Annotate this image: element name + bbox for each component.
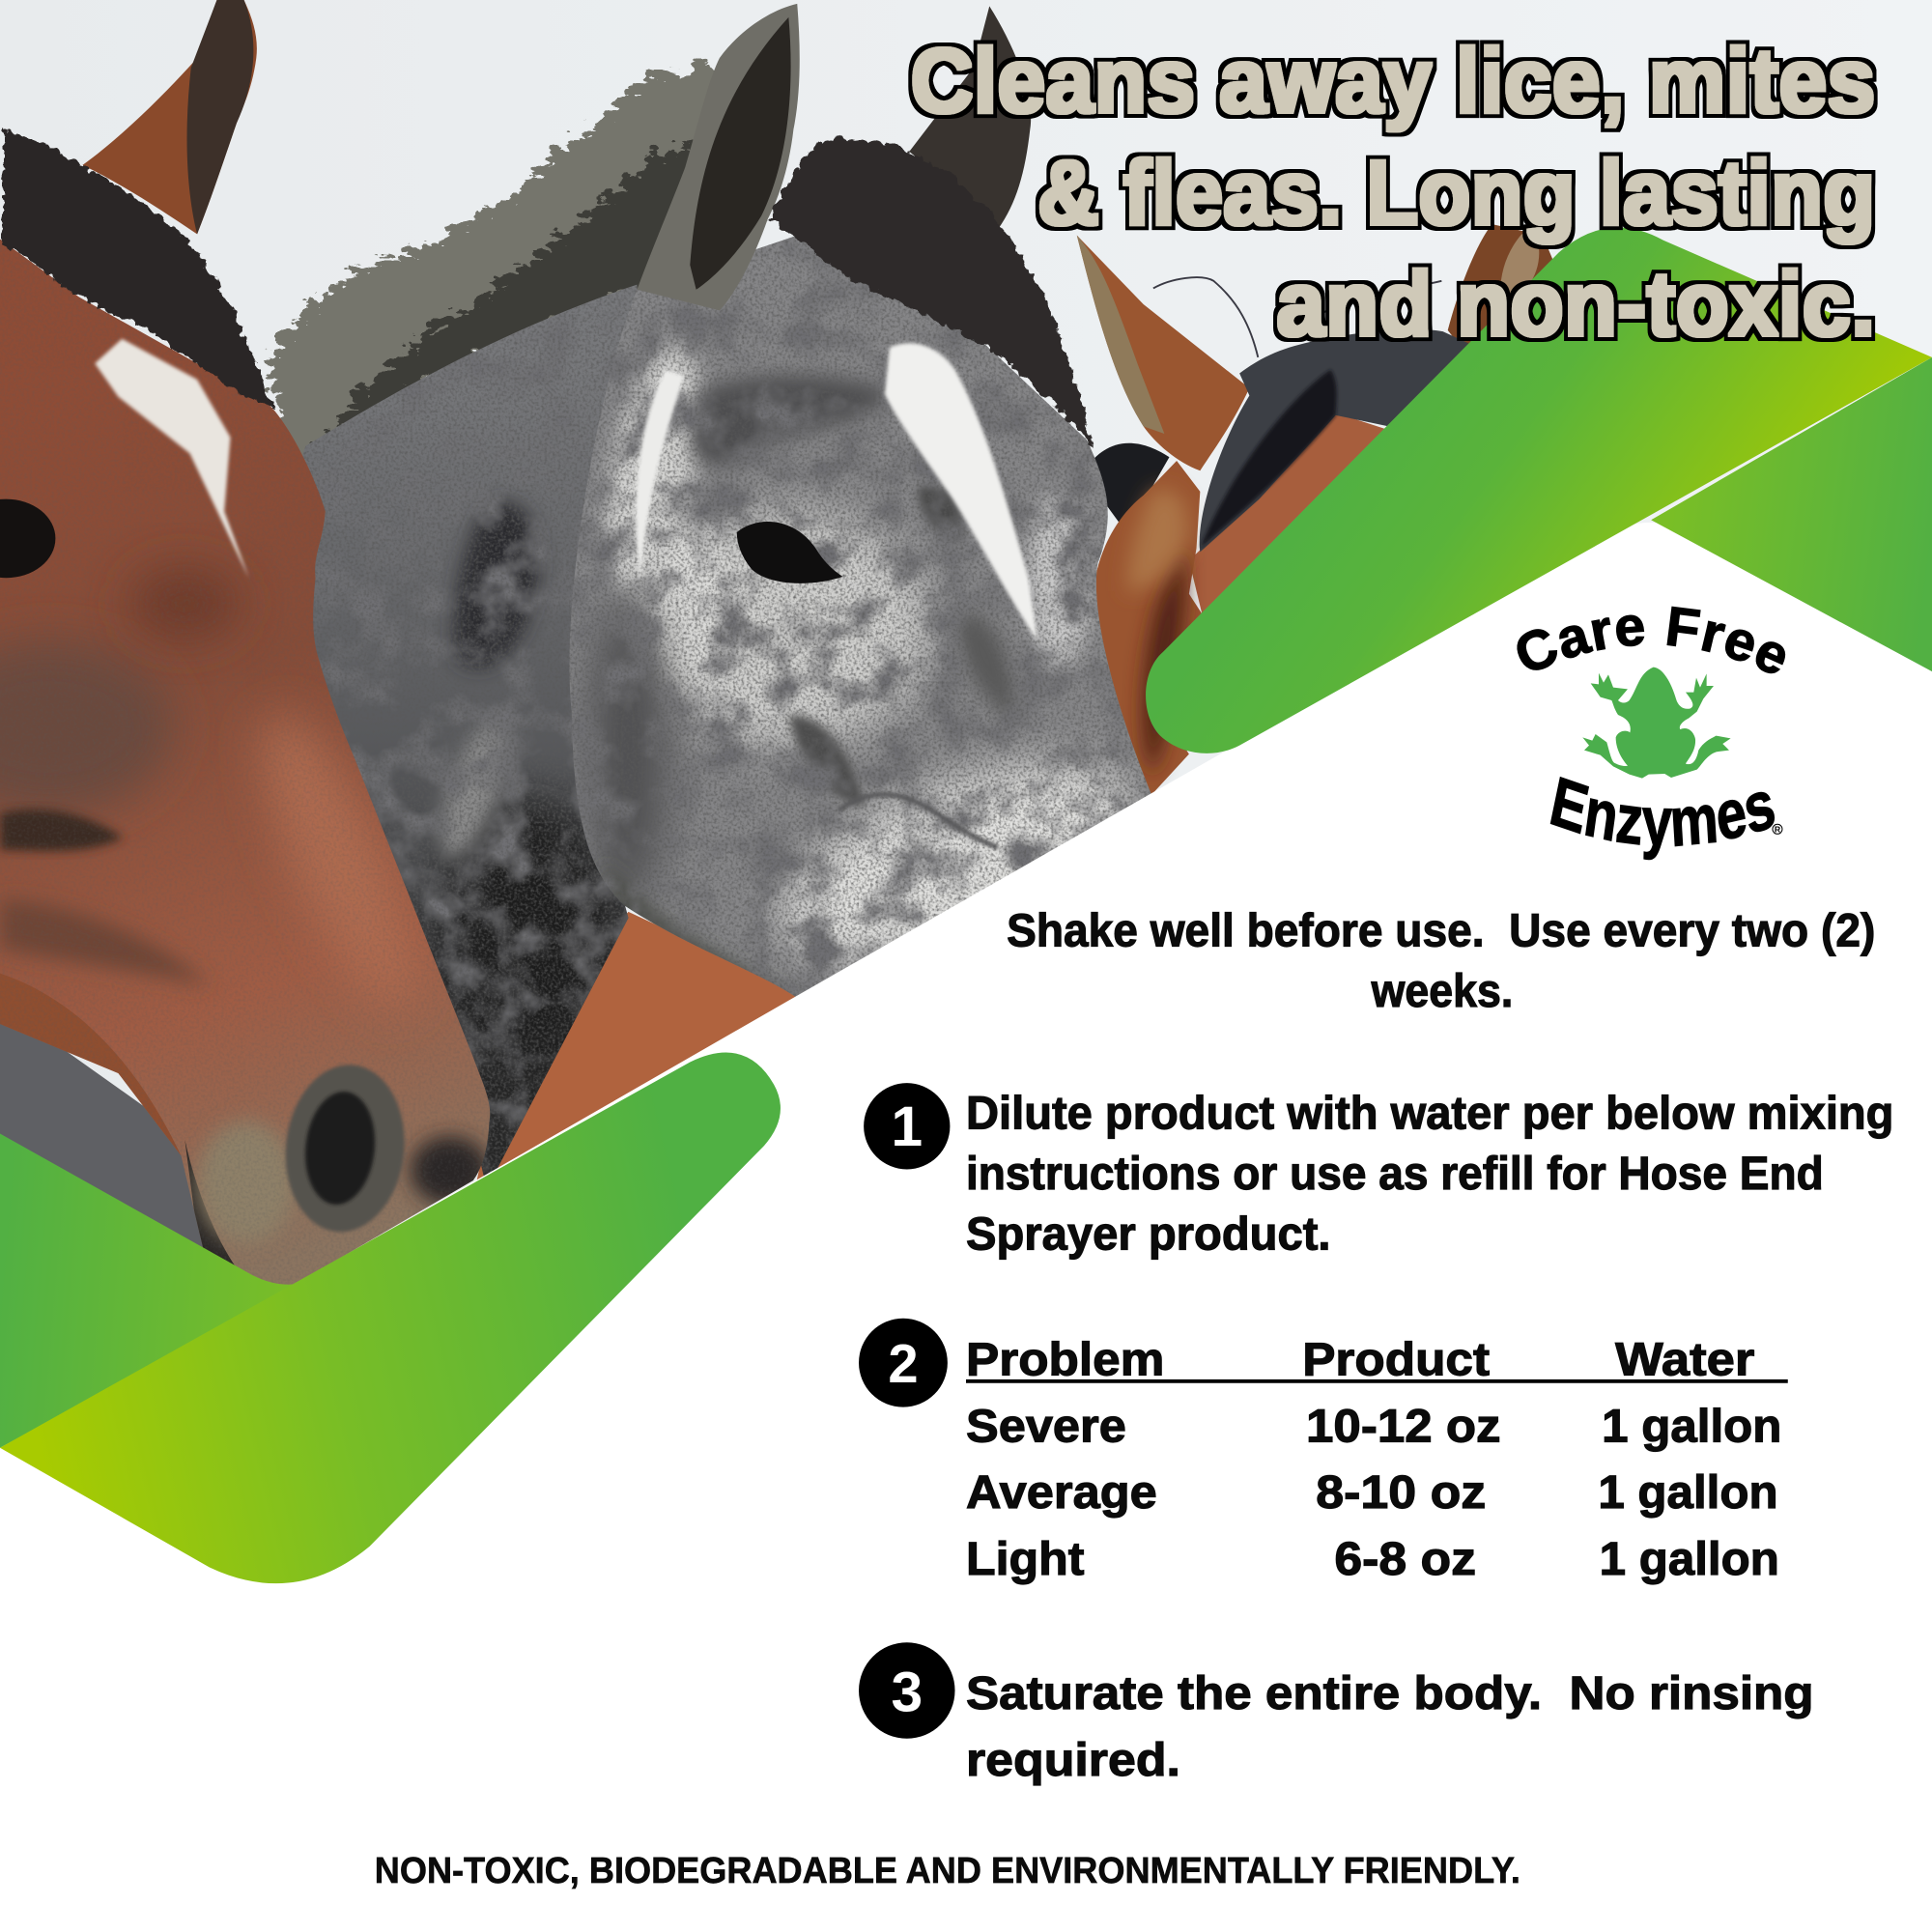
mixing table: 1 gallon [1600,1533,1779,1585]
intro instruction: Shake well before use. Use every two (2) [1007,905,1875,957]
photo: grey horse neck [303,284,638,1177]
photo: dark dapples [690,376,894,465]
photo: grey horse front ear [637,4,800,310]
step 3 badge [859,1642,955,1739]
title: & fleas. Long lasting [1037,143,1875,244]
mixing table: Product [1302,1333,1490,1385]
photo: far ear [1448,224,1555,370]
step 3 text [966,1667,1814,1786]
photo: cheek [1093,461,1208,801]
mixing table: Light [966,1533,1084,1585]
photo: brown horse eye [0,499,55,578]
step 3 text: required. [966,1734,1180,1786]
registered mark: R [1775,825,1781,835]
mixing table [966,1333,1788,1585]
step 1 text: instructions or use as refill for Hose End [966,1148,1824,1200]
step 3 badge: 3 [891,1662,923,1724]
green shape: top right front [1146,227,1932,753]
footer note: NON-TOXIC, BIODEGRADABLE AND ENVIRONMENTALLY FRIENDLY. [375,1850,1520,1891]
photo: chestnut horse at right [1077,224,1555,801]
mixing table: Average [966,1466,1157,1519]
photo: chestnut neck at bottom [474,912,813,1195]
logo: Care Free Enzymes [1517,607,1785,860]
title: Cleans away lice, mites [911,31,1875,132]
step 1 badge: 1 [891,1095,923,1158]
photo: hair wisps [1153,277,1441,357]
mixing table: 8-10 oz [1316,1466,1486,1519]
photo: other horse black forelock [1094,443,1169,532]
step 1 text: Sprayer product. [966,1208,1331,1260]
photo: white blaze [885,343,1037,640]
photo: nostril [277,1059,412,1237]
mixing table: 1 gallon [1602,1400,1781,1452]
photo: grey horse forelock [768,135,1090,446]
photo: mouth crease [838,794,998,848]
photo: grey horse mane wisps [267,62,715,450]
photo: grey horse head [554,234,1158,1010]
photo: grey horse eye [737,522,842,583]
step 2 badge [859,1319,948,1407]
mixing table: Water [1615,1333,1754,1385]
step 1 text [966,1087,1893,1260]
mixing table: 6-8 oz [1334,1533,1476,1585]
photo: grey coat under brown horse [0,1005,219,1282]
intro instruction: weeks. [1371,965,1513,1017]
green shape: bottom left rear [0,1133,321,1448]
photo: white star [95,339,249,578]
registered mark [1773,824,1782,835]
logo wordmark: Care Free: Care Free [1517,607,1785,674]
green shape: top right rear [1651,357,1932,671]
step 1 badge [864,1083,950,1169]
photo: brown horse ear [82,0,257,234]
step 1 text: Dilute product with water per below mixing [966,1087,1893,1139]
step 3 text: Saturate the entire body. No rinsing [966,1667,1814,1719]
photo: sky background [0,0,1932,1355]
mixing table: 1 gallon [1598,1466,1778,1519]
photo: mane [1200,329,1475,552]
photo: grey horse far ear [909,6,1031,229]
step 2 badge: 2 [888,1333,919,1394]
logo wordmark: Enzymes: Enzymes [1549,777,1776,860]
photo: light area around eye [647,511,930,746]
photo: forehead [1189,412,1392,616]
icon: green frog [1582,668,1731,779]
white content panel [0,523,1932,1932]
title: and non-toxic. [1276,254,1875,355]
intro instruction [1007,905,1875,1017]
mixing table: Problem [966,1333,1164,1385]
mixing table: 10-12 oz [1306,1400,1501,1452]
mixing table: Severe [966,1400,1126,1452]
photo: brown horse head [0,234,493,1293]
title [911,31,1875,355]
photo: ear [1077,236,1249,470]
photo: brown horse mane [0,128,271,407]
green shape: bottom left front [0,1053,781,1583]
photo: light muzzle [763,736,1147,980]
